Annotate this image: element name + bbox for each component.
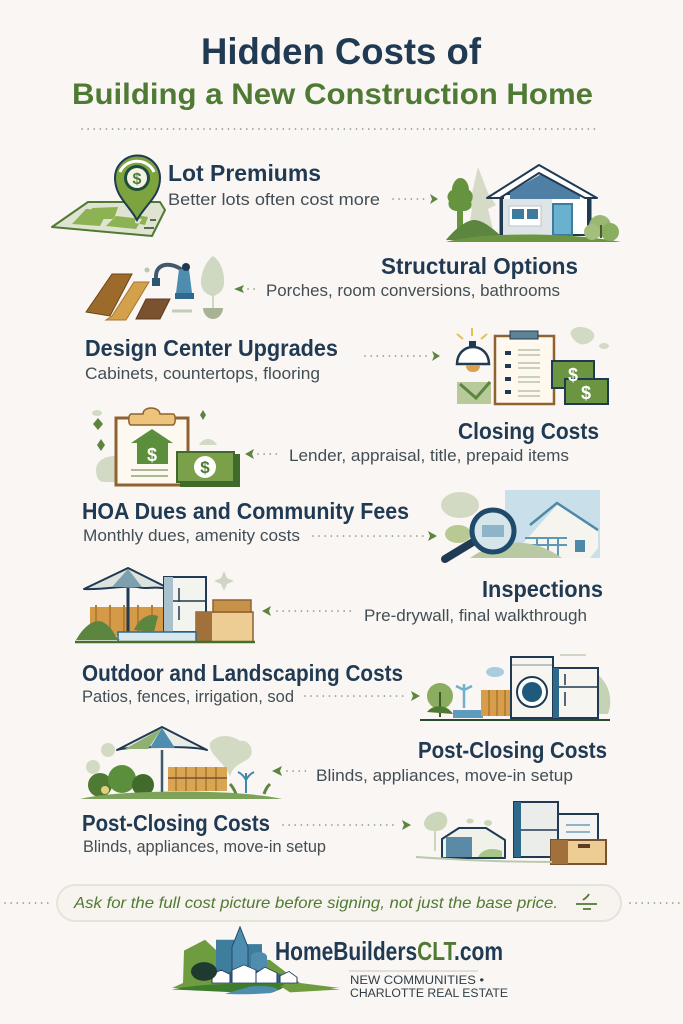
icon: clipboard with house and cash: $ [200, 458, 210, 477]
icon: house with trees [446, 165, 621, 242]
callout banner [57, 885, 621, 921]
row: HOA dues text: HOA Dues and Community Fees [82, 498, 409, 524]
row: structural options text: Porches, room conversions, bathrooms [266, 282, 560, 300]
title: Hidden Costs of [201, 31, 482, 72]
title [72, 31, 593, 111]
arrow: design center upgrades [365, 351, 440, 361]
row: HOA dues text [82, 498, 409, 545]
row: post-closing costs (right) text: Blinds, appliances, move-in setup [316, 767, 573, 785]
row: inspections text [364, 576, 603, 625]
row: closing costs text [289, 418, 599, 465]
row: design center upgrades text [85, 335, 338, 383]
icon: pendant lamp, checklist and cash: $ [581, 383, 591, 403]
row: inspections text: Inspections [482, 576, 603, 602]
icon: clipboard with house and cash [92, 408, 240, 487]
row: lot premiums text [168, 160, 380, 209]
callout banner: Ask for the full cost picture before signing, not just the base price. [73, 895, 558, 912]
row: post-closing costs (left) text: Post-Closing Costs [82, 810, 270, 836]
icon: pendant lamp, checklist and cash [457, 327, 609, 404]
icon: clipboard with house and cash: $ [147, 445, 157, 465]
row: design center upgrades text: Cabinets, countertops, flooring [85, 365, 320, 383]
icon: tree, sprinkler, fence, washer and fridge [420, 655, 610, 720]
arrow: inspections [262, 606, 355, 616]
logo: skyline and community [172, 927, 340, 994]
row: structural options text [266, 253, 578, 300]
arrow: HOA dues [313, 531, 437, 541]
row: closing costs text: Closing Costs [458, 418, 599, 444]
row: post-closing costs (right) text: Post-Closing Costs [418, 737, 607, 763]
row: lot premiums text: Lot Premiums [168, 160, 321, 186]
arrow: lot premiums [393, 194, 438, 204]
icon: map with location pin [52, 156, 165, 236]
row: inspections text: Pre-drywall, final walkthrough [364, 607, 587, 625]
row: post-closing costs (left) text [82, 810, 326, 856]
row: outdoor and landscaping text: Outdoor and Landscaping Costs [82, 660, 403, 686]
row: outdoor and landscaping text [82, 660, 403, 706]
row: lot premiums text: Better lots often cost more [168, 191, 380, 209]
row: post-closing costs (left) text: Blinds, appliances, move-in setup [83, 838, 326, 856]
row: closing costs text: Lender, appraisal, title, prepaid items [289, 447, 569, 465]
arrow: post-closing costs (right) [272, 766, 308, 776]
icon: magnifier over house [441, 490, 600, 559]
row: structural options text: Structural Options [381, 253, 578, 279]
row: design center upgrades text: Design Center Upgrades [85, 335, 338, 361]
logo: wordmark: HomeBuildersCLT.com [275, 936, 503, 966]
row: post-closing costs (right) text [316, 737, 607, 785]
icon: wood planks and faucet [86, 256, 224, 320]
arrow: post-closing costs (left) [283, 820, 411, 830]
icon: map with location pin: $ [133, 171, 142, 188]
arrow: structural options [234, 285, 260, 293]
icon: umbrella, fridge, fence and boxes [75, 568, 255, 642]
logo: tagline: CHARLOTTE REAL ESTATE [350, 988, 508, 1000]
icon: pendant lamp, checklist and cash: $ [568, 365, 578, 385]
title: Building a New Construction Home [72, 78, 593, 111]
logo: tagline [350, 975, 508, 1000]
arrow: outdoor and landscaping [305, 691, 420, 701]
logo: tagline: NEW COMMUNITIES • [350, 975, 484, 987]
row: HOA dues text: Monthly dues, amenity costs [83, 527, 300, 545]
row: outdoor and landscaping text: Patios, fences, irrigation, sod [82, 688, 294, 706]
icon: umbrella, garden, fence and sprinkler [80, 727, 282, 799]
logo [172, 927, 508, 1000]
icon: garage, fridge and box [416, 802, 606, 864]
arrow: closing costs [245, 449, 282, 459]
